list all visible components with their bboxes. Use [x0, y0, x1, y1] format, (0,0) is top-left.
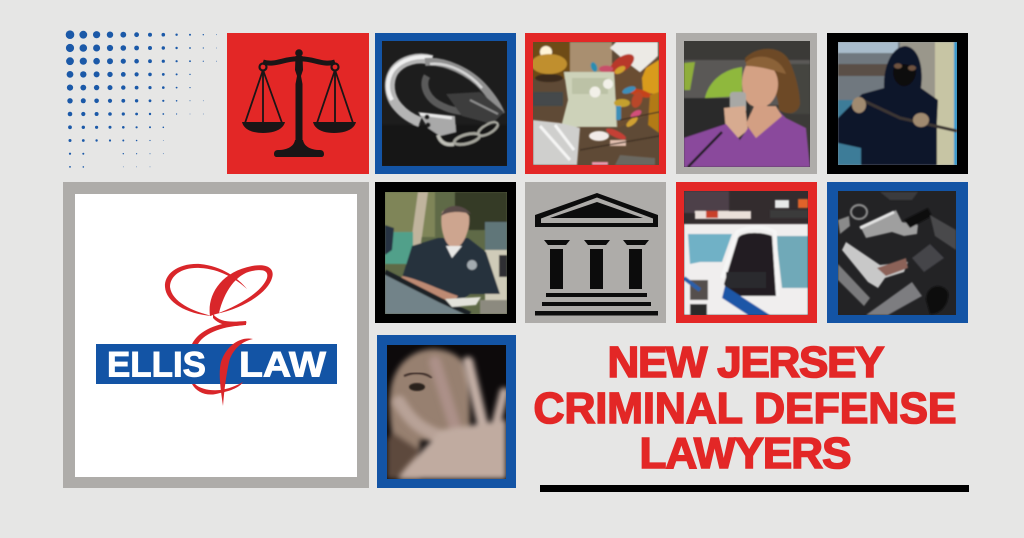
tile: logo panel — [63, 182, 369, 488]
photo: burglar with crowbar — [838, 42, 957, 165]
photo: handguns and magazines — [838, 192, 956, 315]
halftone dot pattern — [66, 30, 217, 168]
tile: masked burglar photo — [827, 33, 968, 174]
photo: handcuffs — [384, 52, 506, 148]
title underline — [540, 485, 969, 492]
tile: courthouse icon — [525, 182, 666, 323]
photo: officer writing a report — [385, 192, 507, 314]
tile: police cars photo — [676, 182, 817, 323]
tile: woman raising hand photo — [377, 335, 516, 488]
photo: woman using breathalyzer in car — [684, 49, 810, 167]
logo: Ellis Law — [96, 264, 337, 406]
photo: police car with lightbar — [684, 191, 808, 315]
title line 3: LAWYERS — [640, 429, 852, 478]
title line 2: CRIMINAL DEFENSE — [534, 384, 956, 433]
tile: breathalyzer photo — [676, 33, 817, 174]
icon: balance scales — [242, 49, 356, 157]
tile: firearms photo — [827, 182, 968, 323]
photo: pills, cash and baggie — [531, 42, 659, 165]
tile: police officer photo — [375, 182, 516, 323]
tile: pills and drugs photo — [525, 33, 666, 174]
title — [534, 338, 956, 478]
logo script E lower — [192, 322, 253, 406]
logo banner text left: ELLIS — [107, 346, 206, 384]
tile: scales of justice icon — [227, 33, 369, 174]
title line 1: NEW JERSEY — [608, 338, 884, 387]
tile: handcuffs photo — [375, 33, 516, 174]
logo banner — [96, 344, 337, 384]
logo banner text right: LAW — [239, 346, 326, 384]
logo script E upper — [165, 264, 273, 326]
photo: woman shielding face with hand — [387, 349, 506, 479]
icon: courthouse — [535, 193, 658, 316]
